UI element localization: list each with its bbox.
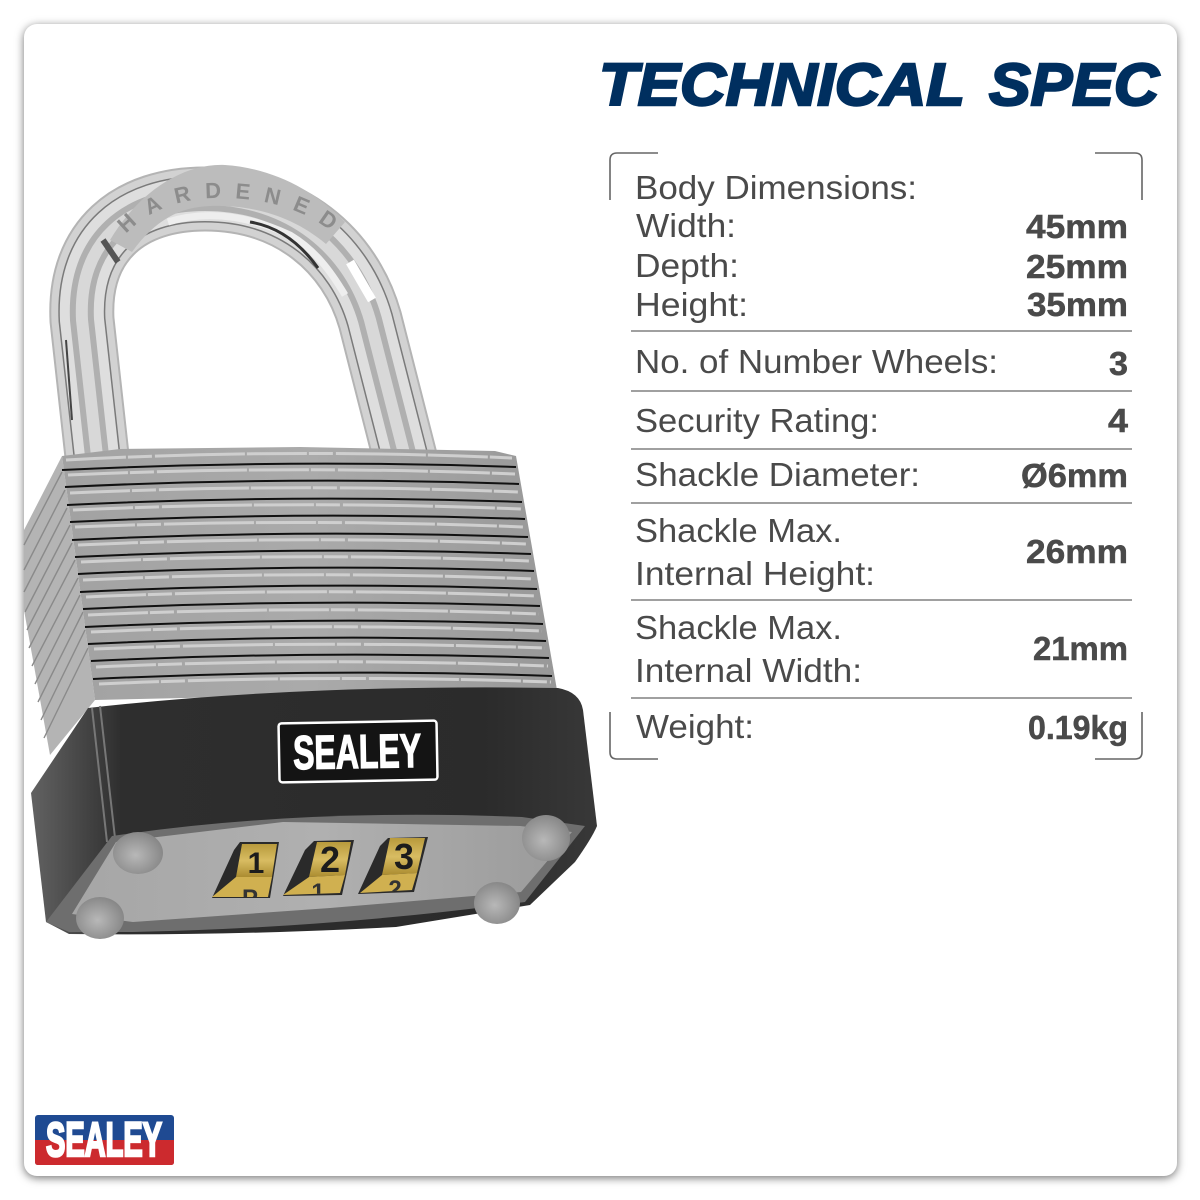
combination wheels: 2 — [388, 876, 402, 903]
laminated steel plates — [62, 447, 557, 700]
row: body dimensions: 35mm — [1027, 286, 1128, 323]
spec table — [610, 153, 1142, 759]
combination wheels: 3 — [394, 836, 414, 877]
row: shackle internal width: Internal Width: — [635, 652, 862, 689]
row: shackle internal height — [635, 512, 1128, 592]
laminated side — [24, 456, 95, 755]
icon: combination padlock — [24, 164, 597, 939]
rivets — [76, 815, 570, 939]
title: TECHNICAL — [599, 52, 965, 118]
row: body dimensions — [635, 169, 1128, 323]
row: number wheels: No. of Number Wheels: — [635, 343, 998, 380]
row: body dimensions: Height: — [635, 286, 748, 323]
row: security rating — [635, 402, 1129, 439]
title — [599, 52, 1160, 118]
row: shackle internal height: Shackle Max. — [635, 512, 842, 549]
row: shackle internal height: Internal Height: — [635, 555, 875, 592]
row: shackle diameter: Shackle Diameter: — [635, 456, 920, 493]
row: body dimensions: Width: — [636, 207, 736, 244]
title: SPEC — [989, 52, 1160, 118]
row: shackle diameter: Ø6mm — [1021, 457, 1128, 494]
row: body dimensions: 45mm — [1026, 208, 1128, 245]
combination wheels: P — [242, 885, 258, 912]
row: shackle diameter — [635, 456, 1128, 494]
combination wheels: 2 — [320, 839, 340, 880]
combination wheels: 1 — [248, 847, 264, 880]
row: body dimensions: Body Dimensions: — [635, 169, 917, 206]
row: shackle internal width: Shackle Max. — [635, 609, 842, 646]
lock base — [31, 687, 597, 934]
shackle engraving: HARDENED — [116, 182, 336, 233]
shackle — [66, 165, 407, 465]
silver face plate — [72, 822, 572, 922]
combination wheels — [212, 837, 428, 898]
row: security rating: Security Rating: — [635, 402, 879, 439]
padlock brand badge: SEALEY — [293, 724, 421, 779]
row: number wheels — [635, 343, 1128, 382]
row: shackle internal width — [635, 609, 1128, 689]
row: weight: Weight: — [636, 708, 754, 745]
row: weight — [636, 708, 1128, 746]
combination wheels: 1 — [311, 879, 325, 906]
row: shackle internal height: 26mm — [1026, 533, 1128, 570]
row: weight: 0.19kg — [1028, 709, 1128, 746]
row: body dimensions: 25mm — [1026, 248, 1128, 285]
row: security rating: 4 — [1108, 402, 1129, 439]
logo: Sealey: SEALEY — [46, 1113, 162, 1166]
row: number wheels: 3 — [1109, 345, 1128, 382]
row: shackle internal width: 21mm — [1033, 630, 1128, 667]
row: body dimensions: Depth: — [635, 247, 739, 284]
corner brackets — [610, 153, 1142, 759]
